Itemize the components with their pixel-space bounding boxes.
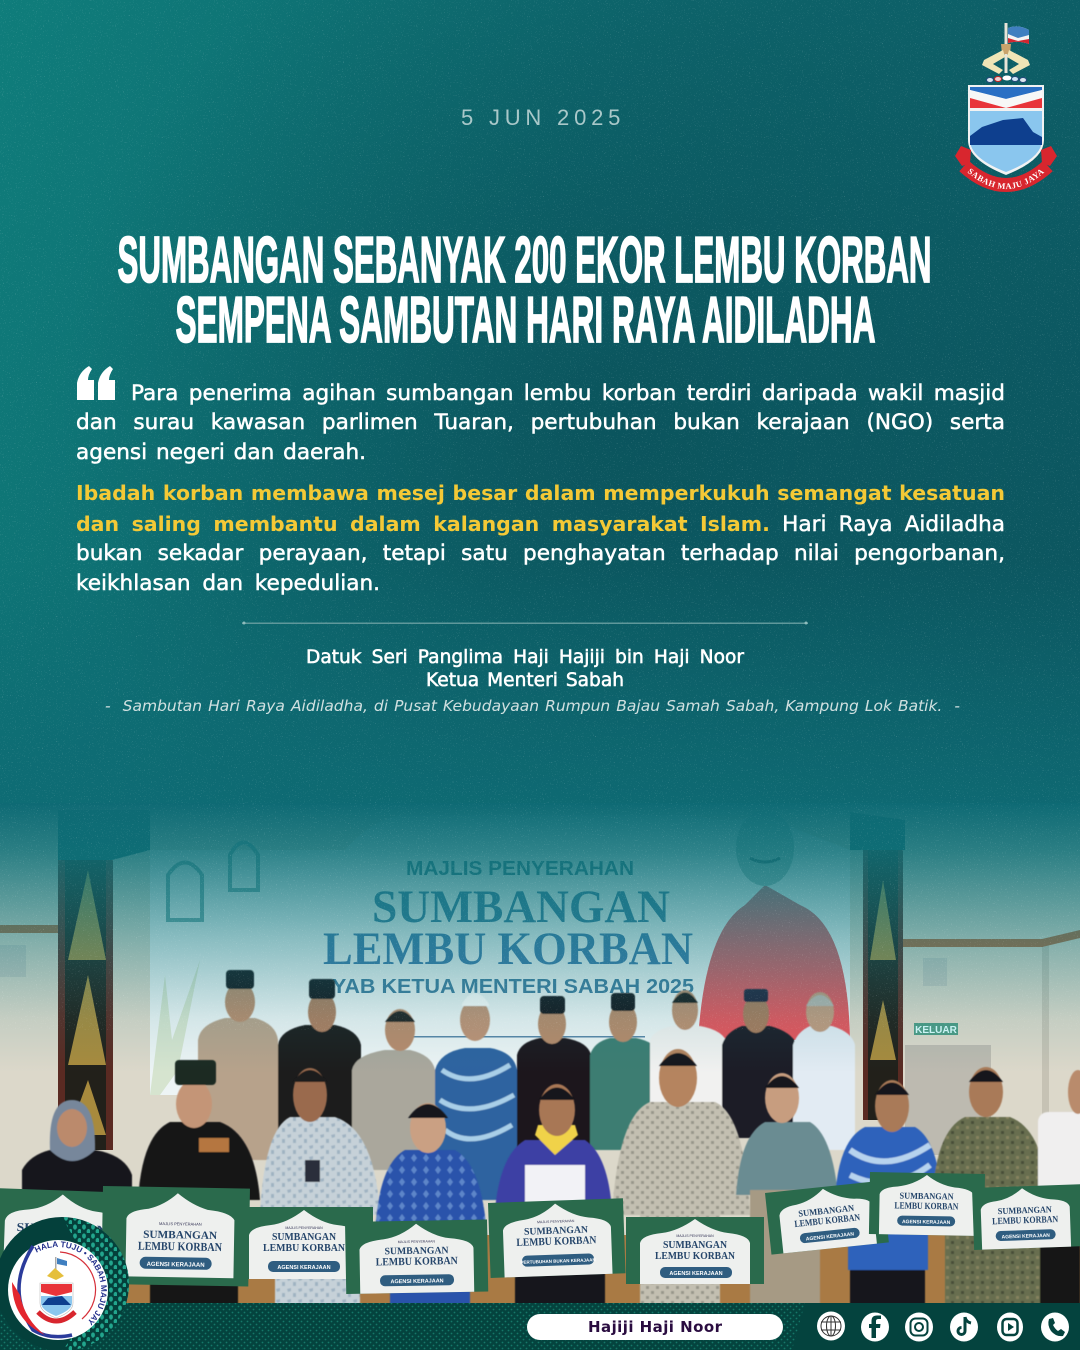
crest: Sabah coat of arms [955, 23, 1057, 192]
backdrop heading: YAB KETUA MENTERI SABAH 2025 [332, 976, 694, 998]
icon: youtube [997, 1312, 1023, 1342]
round logo badge [0, 1217, 129, 1350]
quote paragraph 2 [76, 481, 1005, 596]
quote mark icon [77, 366, 115, 400]
badge mini crest [38, 1257, 75, 1321]
backdrop portrait [699, 836, 850, 1040]
sign 5: LEMBU KORBAN [516, 1234, 597, 1249]
back row people [198, 970, 855, 1200]
backdrop heading [323, 858, 694, 1038]
title [118, 223, 932, 356]
sign 6: LEMBU KORBAN [655, 1250, 735, 1262]
quote paragraph 1 [76, 380, 1005, 464]
quote divider [242, 622, 808, 624]
event photo [0, 805, 1080, 1305]
icon: instagram [905, 1312, 933, 1342]
quote paragraph 2: dan saling membantu dalam kalangan masyarakat Islam. Hari Raya Aidiladha [76, 512, 1005, 536]
sign 3: SUMBANGAN [272, 1232, 337, 1243]
sign 6: MAJLIS PENYERAHAN [676, 1234, 714, 1238]
floor [126, 1235, 1080, 1303]
backdrop heading: SUMBANGAN [372, 881, 670, 933]
right wall door and exit sign [0, 940, 1049, 1160]
speckle texture [0, 0, 1080, 1030]
sign 4: AGENSI KERAJAAN [390, 1278, 444, 1285]
quote paragraph 1: Para penerima agihan sumbangan lembu korban terdiri daripada wakil masjid [131, 380, 1005, 406]
quote paragraph 1: dan surau kawasan parlimen Tuaran, pertubuhan bukan kerajaan (NGO) serta [76, 410, 1005, 434]
ceiling drapes [58, 816, 905, 860]
sign 4: SUMBANGAN [384, 1245, 449, 1257]
icon: facebook [861, 1312, 889, 1342]
sign 7: AGENSI KERAJAAN [806, 1231, 855, 1242]
sign 5: MAJLIS PENYERAHAN [537, 1219, 575, 1224]
quote paragraph 2: Ibadah korban membawa mesej besar dalam memperkukuh semangat kesatuan [76, 481, 1005, 505]
crest: Sabah coat of arms: SABAH MAJU JAYA [968, 168, 1044, 190]
sign 1: SUMBANGAN [16, 1220, 107, 1237]
sign 2: SUMBANGAN [143, 1229, 217, 1242]
name pill: Hajiji Haji Noor [588, 1318, 723, 1336]
icon: phone [1041, 1312, 1069, 1342]
carved pillars [58, 850, 903, 1150]
sign 9: LEMBU KORBAN [992, 1215, 1058, 1227]
sign 3: AGENSI KERAJAAN [277, 1265, 331, 1271]
sign 5: SUMBANGAN [524, 1225, 589, 1238]
attribution: - Sambutan Hari Raya Aidiladha, di Pusat Kebudayaan Rumpun Bajau Samah Sabah, Kampung Lok Batik. - [105, 697, 960, 715]
sign 6: SUMBANGAN [663, 1240, 728, 1251]
quote paragraph 2: bukan sekadar perayaan, tetapi satu penghayatan terhadap nilai pengorbanan, [76, 540, 1005, 566]
sign 6: AGENSI KERAJAAN [669, 1271, 723, 1277]
sign 4 [345, 1220, 488, 1294]
footer band [0, 1303, 1080, 1350]
front row people [22, 1049, 1080, 1305]
lanterns [168, 842, 258, 920]
attribution: Ketua Menteri Sabah [426, 670, 624, 691]
wall trim [0, 925, 1080, 947]
sign 2: MAJLIS PENYERAHAN [159, 1221, 202, 1227]
sign 1 [0, 1188, 103, 1258]
sign 4: MAJLIS PENYERAHAN [398, 1239, 436, 1244]
attribution: Datuk Seri Panglima Haji Hajiji bin Haji Noor [306, 647, 744, 668]
icon: tiktok [950, 1312, 978, 1342]
photo teal fade [0, 803, 1080, 1073]
sign 7: LEMBU KORBAN [794, 1213, 861, 1230]
sign 3 [235, 1207, 373, 1279]
name pill [527, 1314, 783, 1340]
sign 3: LEMBU KORBAN [263, 1242, 345, 1254]
backdrop heading: LEMBU KORBAN [323, 923, 693, 975]
sign 4: LEMBU KORBAN [376, 1255, 458, 1268]
sign 5: PERTUBUHAN BUKAN KERAJAAN [520, 1257, 596, 1265]
sign 7: SUMBANGAN [798, 1203, 855, 1219]
sign 8: LEMBU KORBAN [894, 1201, 959, 1213]
stage backdrop [150, 840, 850, 1095]
sign 7 [765, 1181, 889, 1255]
sign 2: LEMBU KORBAN [138, 1239, 222, 1254]
attribution [105, 647, 960, 715]
sign 6 [626, 1217, 764, 1284]
sign 9: AGENSI KERAJAAN [1001, 1233, 1050, 1240]
sign 8: SUMBANGAN [900, 1191, 954, 1201]
icon: website globe [817, 1312, 845, 1340]
date: 5 JUN 2025 [461, 105, 625, 130]
right wall door and exit sign: KELUAR [915, 1025, 958, 1036]
sign 8: AGENSI KERAJAAN [902, 1219, 951, 1226]
quote paragraph 2: keikhlasan dan kepedulian. [76, 570, 380, 596]
sign 2 [101, 1186, 250, 1287]
sign 3: MAJLIS PENYERAHAN [285, 1226, 323, 1230]
quote paragraph 1: agensi negeri dan daerah. [76, 440, 366, 464]
sign 5 [488, 1198, 626, 1278]
sign 8 [869, 1172, 985, 1236]
sign 9: SUMBANGAN [998, 1204, 1052, 1216]
sign 2: AGENSI KERAJAAN [147, 1262, 205, 1269]
sign 9 [972, 1184, 1080, 1250]
backdrop heading: MAJLIS PENYERAHAN [406, 858, 634, 880]
